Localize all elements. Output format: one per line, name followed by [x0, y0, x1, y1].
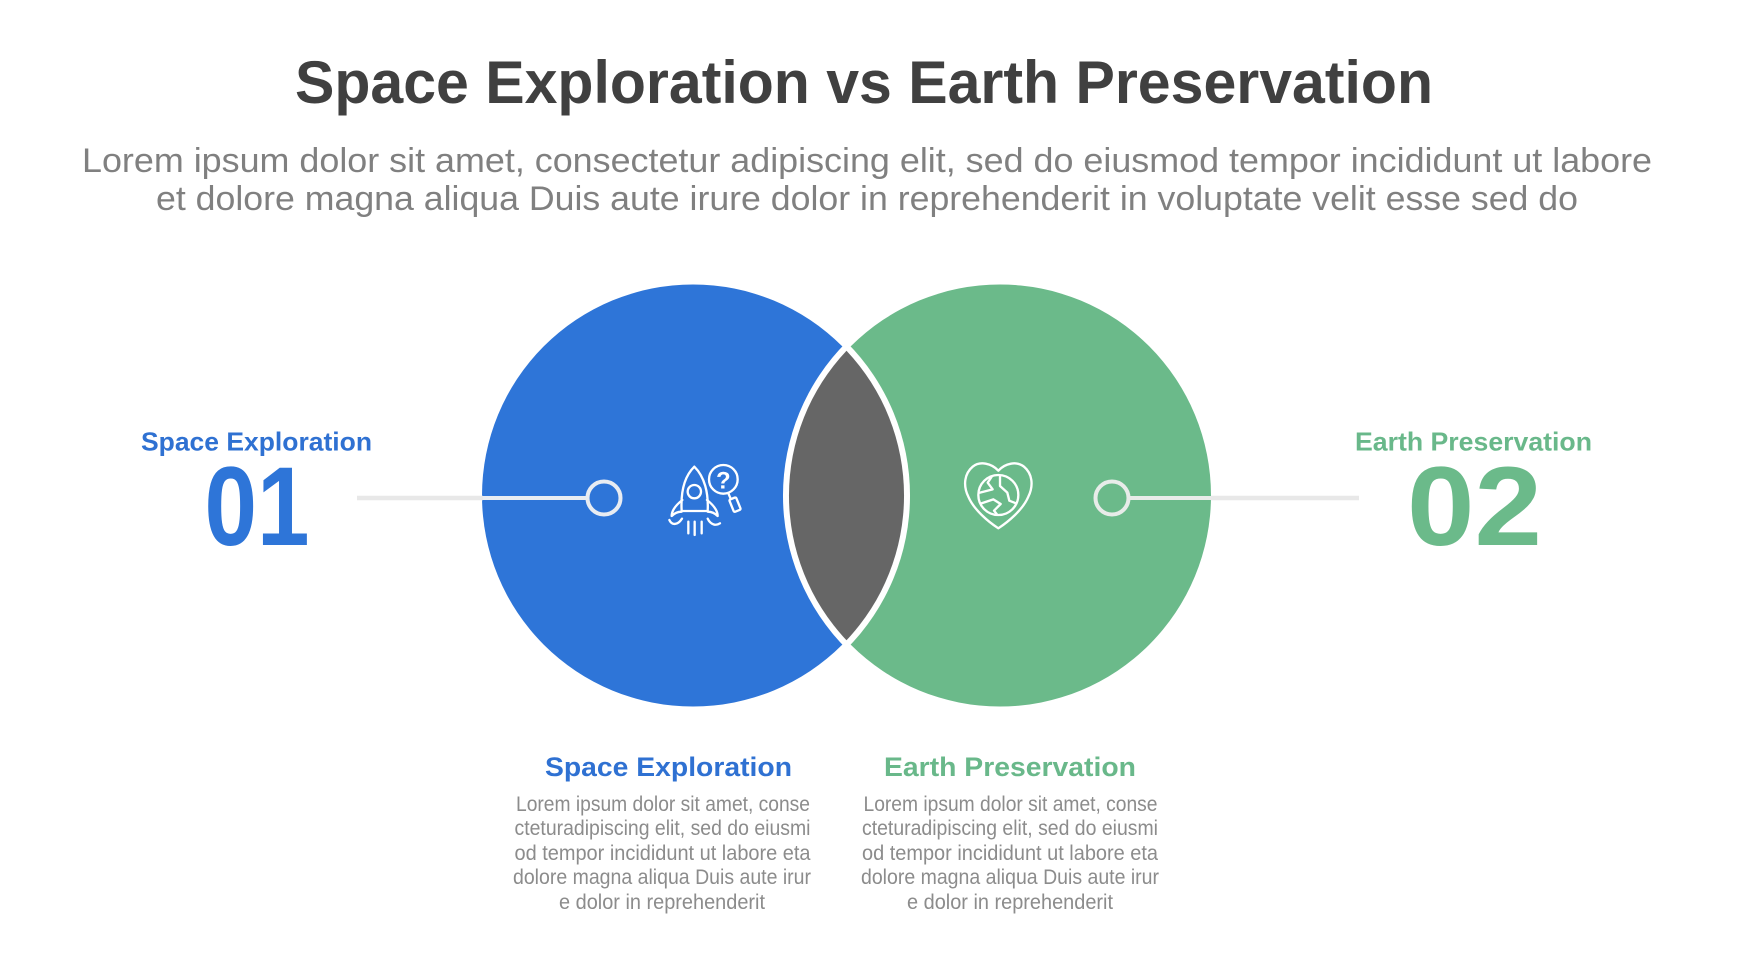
side label heading: Space Exploration: [141, 426, 372, 456]
body copy: [513, 793, 811, 914]
subtitle text block: [82, 142, 1652, 218]
number 01: 01: [204, 444, 310, 569]
text block: space exploration: [513, 752, 811, 914]
lens outline: [783, 342, 910, 649]
body copy: [861, 793, 1159, 914]
subtitle text block: Lorem ipsum dolor sit amet, consectetur adipiscing elit, sed do eiusmod tempor incididunt ut labore: [82, 142, 1652, 180]
title: Space Exploration vs Earth Preservation: [295, 49, 1433, 116]
icon: rocket with magnifier: [669, 465, 741, 535]
icon: heart with globe: [965, 463, 1032, 528]
body copy: cteturadipiscing elit, sed do eiusmi: [862, 817, 1158, 840]
side label: earth preservation: [1355, 426, 1592, 569]
body copy: e dolor in reprehenderit: [907, 891, 1113, 914]
body copy: Lorem ipsum dolor sit amet, conse: [864, 793, 1158, 816]
number 02: 02: [1407, 444, 1542, 569]
venn diagram: [482, 284, 1211, 706]
body copy: e dolor in reprehenderit: [559, 891, 765, 914]
body copy: cteturadipiscing elit, sed do eiusmi: [514, 817, 810, 840]
body copy: dolore magna aliqua Duis aute irur: [513, 866, 811, 889]
connector: right: [1096, 482, 1359, 514]
icon: rocket with magnifier: ?: [716, 467, 731, 494]
body copy: Lorem ipsum dolor sit amet, conse: [516, 793, 810, 816]
subtitle text block: et dolore magna aliqua Duis aute irure dolor in reprehenderit in voluptate velit esse sed do: [156, 180, 1578, 218]
circle: earth preservation: [789, 284, 1211, 706]
lens: overlap: [789, 351, 904, 640]
heading: Space Exploration: [545, 752, 792, 782]
side label heading: Earth Preservation: [1355, 426, 1592, 456]
body copy: od tempor incididunt ut labore eta: [514, 842, 811, 865]
side label: space exploration: [141, 426, 372, 569]
body copy: dolore magna aliqua Duis aute irur: [861, 866, 1159, 889]
body copy: od tempor incididunt ut labore eta: [862, 842, 1158, 865]
circle: space exploration: [482, 284, 904, 706]
heading: Earth Preservation: [884, 752, 1136, 782]
connector: left: [357, 482, 620, 514]
text block: earth preservation: [861, 752, 1159, 914]
